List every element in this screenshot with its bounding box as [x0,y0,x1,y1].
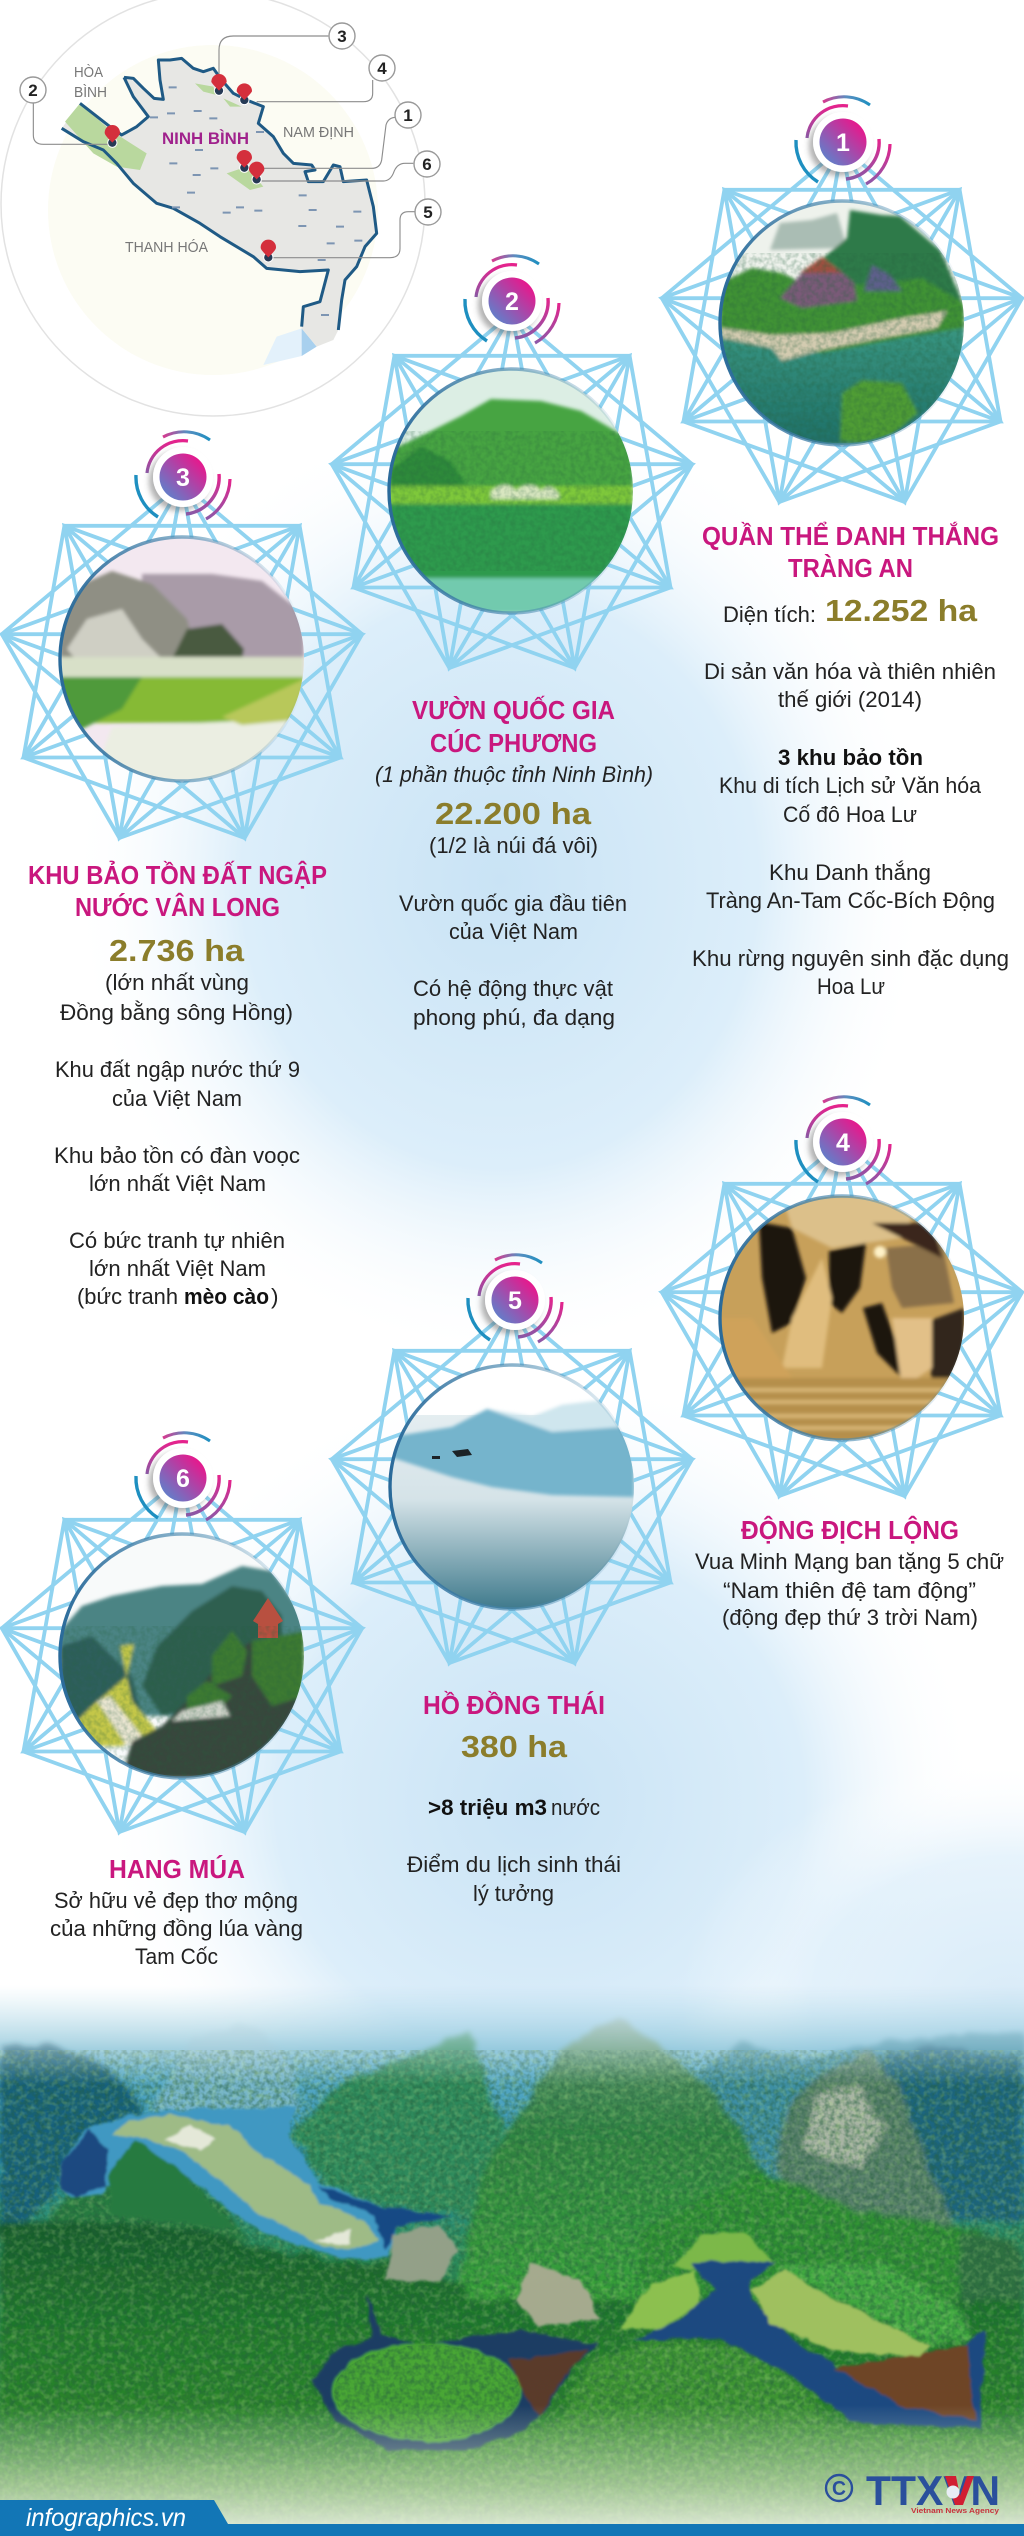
details 3: (bức tranh [77,1284,178,1309]
area 1: 12.252 ha [825,593,978,628]
details 4: (động đẹp thứ 3 trời Nam) [722,1605,978,1630]
photo 2 [389,369,633,613]
photo 1 [720,201,964,445]
title 2: CÚC PHƯƠNG [430,728,597,758]
details 3: của Việt Nam [112,1086,242,1111]
number badge 1: 1 [836,129,850,157]
TTXVN logo: Vietnam News Agency [911,2506,1000,2515]
details 4: Vua Minh Mạng ban tặng 5 chữ [695,1549,1004,1574]
number badge 5: 5 [508,1287,522,1315]
details 4 [695,1549,1004,1630]
landscape photo at bottom [0,1985,1024,2536]
details 3: Khu bảo tồn có đàn voọc [54,1143,300,1168]
details 6: của những đồng lúa vàng [50,1916,303,1941]
details 2: Có hệ động thực vật [413,976,614,1001]
star frame 3 [2,483,362,838]
title 3 [28,860,327,922]
panel: site 2 Cuc Phuong [332,256,692,1030]
area 5: 380 ha [461,1729,568,1764]
details 1 [692,659,1009,999]
map region labels: THANH HÓA [125,239,208,256]
number badge 5 [468,1255,562,1342]
details 1: Hoa Lư [817,974,885,999]
area 1 [723,593,978,628]
details 3: mèo cào [184,1284,269,1309]
details 3 [54,970,300,1309]
details 4: “Nam thiên đệ tam động” [723,1578,976,1603]
area 3: 2.736 ha [109,933,245,968]
TTXVN logo: TTXVN [866,2467,1000,2514]
panel: site 3 Van Long [2,432,362,1309]
area 1: Diện tích: [723,602,816,627]
title 4: ĐỘNG ĐỊCH LỘNG [741,1515,959,1545]
number badge 4 [796,1097,890,1184]
map number markers: 5 [423,203,433,222]
title 1: QUẦN THỂ DANH THẮNG [702,521,999,551]
foliage texture [0,2050,1024,2536]
details 3: Khu đất ngập nước thứ 9 [55,1057,300,1082]
star frame 1 [662,147,1022,502]
title 3: KHU BẢO TỒN ĐẤT NGẬP [28,860,327,890]
map number markers: 1 [403,106,413,125]
map region labels [74,64,354,256]
details 1: Cố đô Hoa Lư [783,802,917,827]
number badge 2 [465,256,559,343]
details 3: Đồng bằng sông Hồng) [60,1000,293,1025]
number badge 3 [136,432,230,519]
title 1 [702,521,999,583]
details 2: (1/2 là núi đá vôi) [429,833,598,858]
details 1: Khu Danh thắng [769,860,931,885]
title 3: NƯỚC VÂN LONG [75,892,280,922]
details 3: lớn nhất Việt Nam [89,1171,266,1196]
star frame 5 [332,1308,692,1663]
number badge 3: 3 [176,464,190,492]
panel: site 5 Dong Thai lake [332,1255,692,1906]
title 2: VƯỜN QUỐC GIA [412,695,615,725]
area 2: 22.200 ha [435,796,592,831]
map panel [1,0,441,416]
panel: site 1 Trang An [662,97,1022,999]
star frame 6 [2,1477,362,1832]
star frame 2 [332,313,692,668]
panel: site 4 Dich Long cave [662,1097,1022,1630]
footer bar [0,2500,1024,2536]
map number markers: 2 [28,81,38,100]
title 6: HANG MÚA [109,1854,245,1884]
map province shape [33,36,415,365]
details 1: Tràng An-Tam Cốc-Bích Động [706,888,995,913]
hills and forest [0,2017,1024,2452]
details 2: phong phú, đa dạng [413,1005,615,1030]
details 3: ) [271,1284,278,1309]
details 2: của Việt Nam [449,919,578,944]
details 3: lớn nhất Việt Nam [89,1256,266,1281]
number badge 6: 6 [176,1465,190,1493]
map number markers [20,23,441,225]
photo 5 [390,1365,634,1609]
details 1: Khu di tích Lịch sử Văn hóa [719,773,981,798]
details 6 [50,1888,303,1969]
photo 4 [720,1196,964,1440]
details 1: Di sản văn hóa và thiên nhiên [704,659,996,684]
number badge 4: 4 [836,1129,850,1157]
details 6: Sở hữu vẻ đẹp thơ mộng [54,1888,298,1913]
star frame 4 [662,1141,1022,1496]
title 2 [412,695,615,758]
map number markers: 3 [337,27,347,46]
map region labels: HÒA [74,64,103,81]
photo 6 [60,1534,304,1778]
details 5: >8 triệu m3 [428,1795,547,1820]
details 5 [407,1795,621,1906]
title 5: HỒ ĐỒNG THÁI [423,1690,605,1720]
details 1: 3 khu bảo tồn [778,745,923,770]
rivers, fields and rocks [60,2106,985,2450]
map number markers: 4 [377,59,387,78]
details 6: Tam Cốc [135,1944,218,1969]
details 2: Vườn quốc gia đầu tiên [399,891,627,916]
details 3: Có bức tranh tự nhiên [69,1228,285,1253]
details 1: thế giới (2014) [778,687,922,712]
panel: site 6 Hang Mua [2,1433,362,1969]
map region labels: NINH BÌNH [162,129,249,148]
details 5: Điểm du lịch sinh thái [407,1852,621,1877]
footer website text: infographics.vn [26,2504,186,2532]
map number markers: 6 [422,155,432,174]
subtitle 2: (1 phần thuộc tỉnh Ninh Bình) [375,762,653,787]
number badge 1 [796,97,890,184]
map region labels: BÌNH [74,84,107,101]
details 1: Khu rừng nguyên sinh đặc dụng [692,946,1009,971]
number badge 6 [136,1433,230,1520]
TTXVN logo: C [832,2478,846,2500]
map region labels: NAM ĐỊNH [283,124,354,141]
details 2 [399,833,627,1030]
details 3: (lớn nhất vùng [105,970,249,995]
ring island texture [334,2345,520,2439]
number badge 2: 2 [505,288,519,316]
map pins [105,74,276,262]
photo 3 [60,537,304,781]
details 5: lý tưởng [473,1881,554,1906]
details 5: nước [551,1795,600,1820]
title 1: TRÀNG AN [788,553,913,583]
